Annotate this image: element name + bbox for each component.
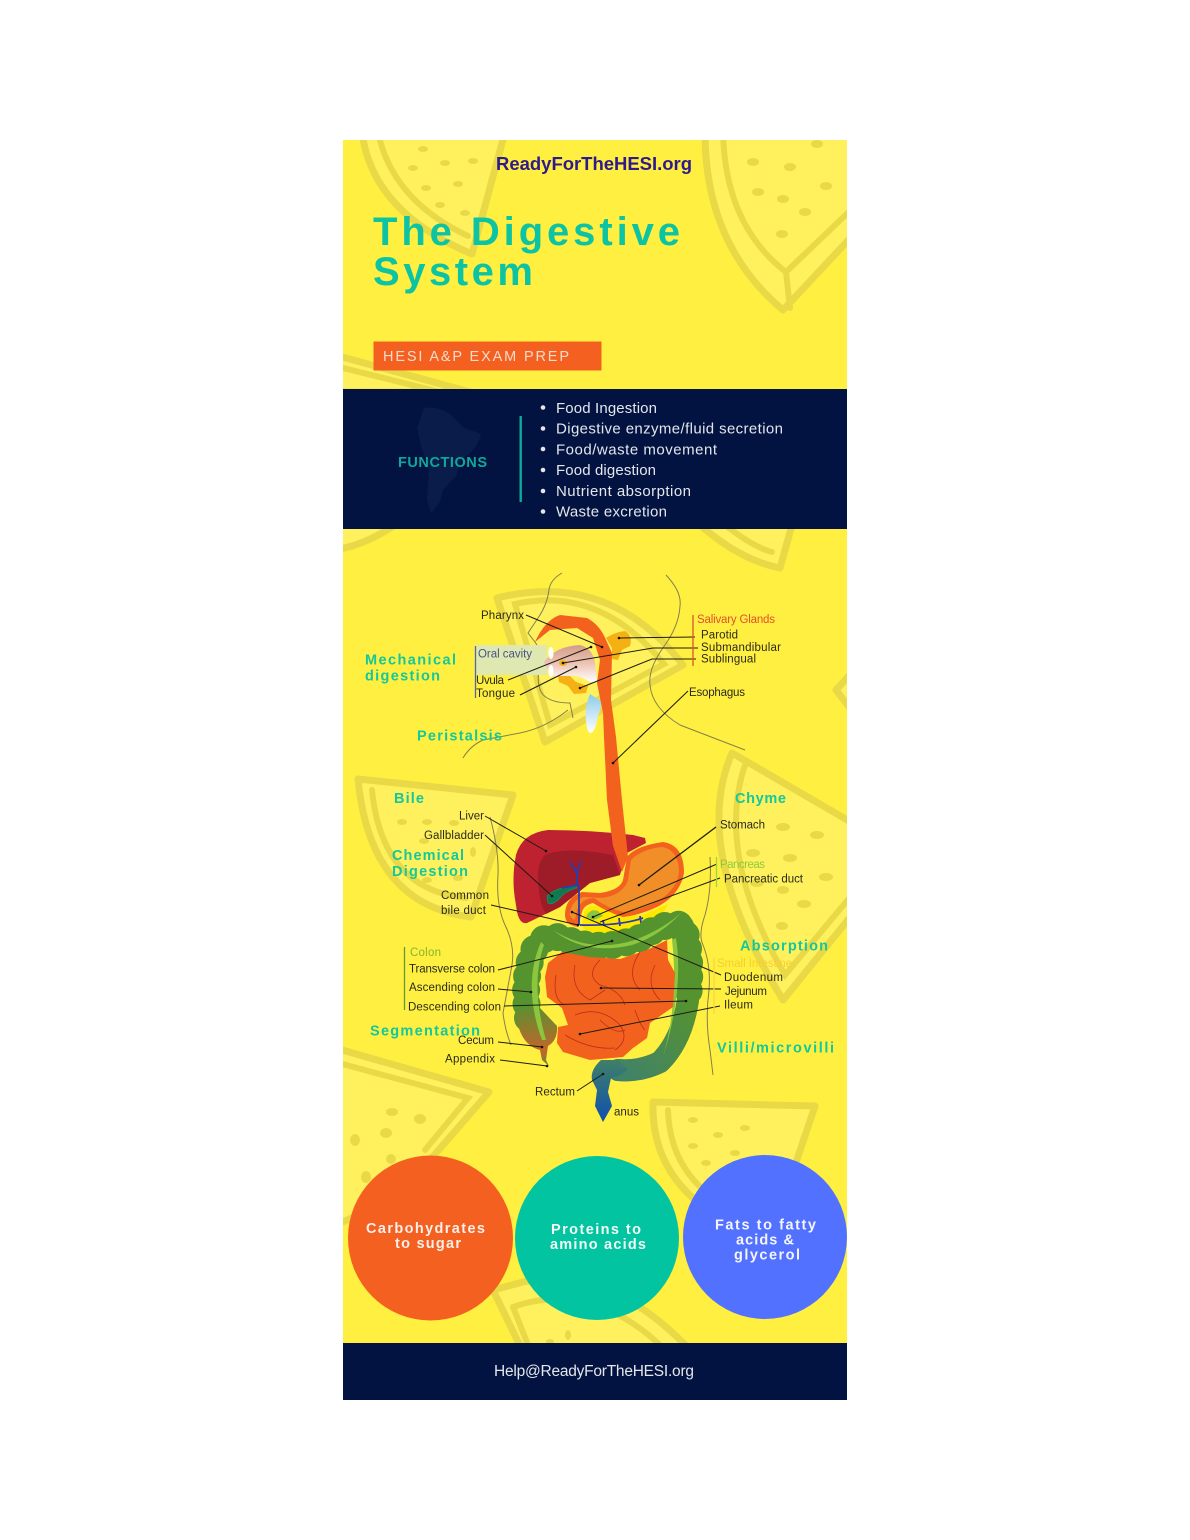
stomach: [565, 842, 684, 927]
process labels: Absorption: [740, 938, 828, 954]
anatomy labels: Small Intestine: [717, 958, 792, 970]
background lemon wedge pattern: [335, 132, 856, 1350]
rectum and anus: [592, 1060, 628, 1122]
teeth: [548, 647, 554, 677]
anatomy labels: Submandibular: [701, 642, 781, 654]
oral cavity shading: [475, 645, 547, 675]
anatomy labels: Descending colon: [408, 1002, 501, 1014]
functions list: Waste excretion: [556, 504, 667, 520]
cecum: [516, 1007, 557, 1066]
tongue and mouth: [544, 645, 597, 682]
anatomy labels: Liver: [459, 810, 484, 822]
functions heading: FUNCTIONS: [398, 455, 487, 471]
process labels: Segmentation: [370, 1024, 480, 1040]
leader lines: [485, 615, 721, 1091]
esophagus and pharynx: [535, 615, 628, 872]
divider: [520, 416, 522, 502]
title: System: [373, 250, 533, 294]
circle: proteins: amino acids: [550, 1237, 646, 1253]
process labels: Bile: [394, 791, 424, 807]
anatomy labels: Esophagus: [689, 687, 745, 699]
process labels: digestion: [365, 668, 440, 684]
footer: Help@ReadyForTheHESI.org: [494, 1363, 694, 1380]
anatomy labels: Rectum: [535, 1086, 575, 1098]
anatomy labels: Pharynx: [481, 610, 524, 622]
small intestine: [545, 940, 675, 1060]
functions list: Food/waste movement: [556, 442, 718, 458]
anatomy labels: Colon: [410, 947, 441, 959]
anatomy labels: Pancreatic duct: [724, 874, 804, 886]
anatomy labels: Cecum: [458, 1035, 494, 1047]
bile and pancreatic ducts: [562, 861, 643, 926]
anatomy labels: Salivary Glands: [697, 614, 775, 626]
process labels: Digestion: [392, 864, 468, 880]
subtitle banner: HESI A&P EXAM PREP: [383, 349, 569, 365]
anatomy labels: Oral cavity: [478, 648, 532, 660]
footer: [343, 1343, 847, 1400]
site name heading: ReadyForTheHESI.org: [496, 153, 692, 174]
functions list: Digestive enzyme/fluid secretion: [556, 420, 783, 438]
anatomy labels: [408, 610, 804, 1118]
title: [373, 210, 680, 294]
circle: fats: Fats to fatty: [715, 1218, 816, 1234]
circle: fats: glycerol: [734, 1248, 800, 1264]
functions list: Nutrient absorption: [556, 483, 691, 500]
functions list: [541, 400, 783, 520]
circle: proteins: [515, 1156, 679, 1320]
functions list: Food digestion: [556, 462, 656, 479]
anatomy labels: Ascending colon: [409, 982, 495, 994]
poster background: [343, 140, 847, 1400]
colon: [526, 924, 689, 1070]
colon highlights: [532, 912, 682, 1057]
anatomy labels: Transverse colon: [409, 964, 495, 976]
circle: proteins: Proteins to: [551, 1222, 641, 1238]
circle: carbohydrates: to sugar: [395, 1236, 461, 1252]
pancreas: [582, 904, 668, 936]
larynx: [586, 694, 602, 733]
map silhouette: [417, 408, 481, 513]
digestive system diagram: [475, 615, 689, 1122]
label brackets: [404, 615, 716, 1014]
anatomy labels: anus: [614, 1106, 639, 1118]
circle: fats: acids &: [736, 1232, 795, 1248]
panel: functions: [343, 389, 847, 529]
anatomy labels: Stomach: [720, 820, 765, 832]
subtitle banner: [374, 342, 602, 370]
circle: carbohydrates: [348, 1156, 513, 1320]
liver: [514, 830, 646, 923]
anatomy labels: Jejunum: [725, 986, 767, 998]
circle: fats: [683, 1155, 847, 1319]
anatomy labels: Sublingual: [701, 654, 756, 666]
process labels: [365, 652, 834, 1056]
circle: carbohydrates: Carbohydrates: [366, 1221, 485, 1237]
anatomy labels: Parotid: [701, 630, 738, 642]
process labels: Chemical: [392, 848, 464, 864]
intestinal folds: [555, 952, 660, 1050]
process labels: Peristalsis: [417, 728, 502, 744]
anatomy labels: Pancreas: [720, 859, 765, 871]
anatomy labels: Duodenum: [724, 972, 783, 984]
process labels: Mechanical: [365, 652, 456, 668]
gallbladder: [547, 885, 577, 904]
body outline: [463, 573, 745, 1075]
anatomy labels: bile duct: [441, 905, 487, 917]
anatomy labels: Ileum: [724, 1000, 753, 1012]
title: The Digestive: [373, 210, 680, 254]
anatomy labels: Appendix: [445, 1054, 495, 1066]
anatomy labels: Common: [441, 890, 489, 902]
anatomy labels: Uvula: [476, 675, 505, 687]
process labels: Chyme: [735, 791, 786, 807]
salivary glands: [558, 631, 631, 694]
process labels: Villi/microvilli: [717, 1040, 834, 1056]
functions list: Food Ingestion: [556, 400, 657, 417]
anatomy labels: Tongue: [476, 688, 515, 700]
anatomy labels: Gallbladder: [424, 830, 484, 842]
